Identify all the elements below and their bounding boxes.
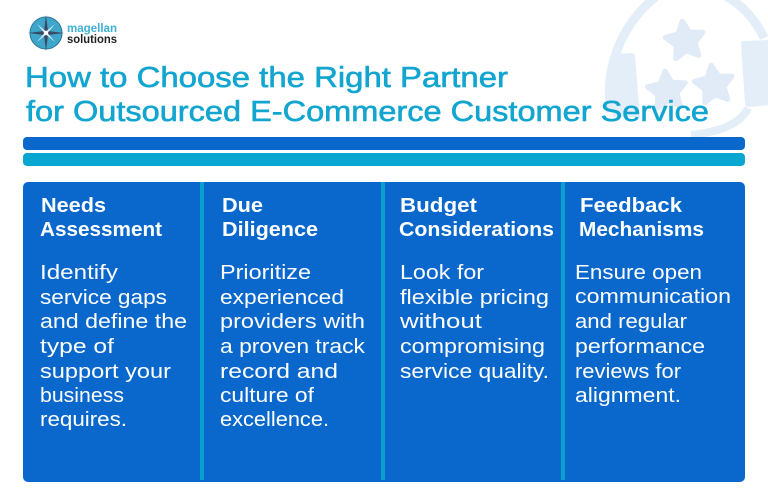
column: needs assessment: Identify <box>40 261 119 284</box>
dark blue bar <box>23 137 745 150</box>
column: needs assessment: requires. <box>40 408 127 431</box>
column: due diligence: excellence. <box>220 408 329 431</box>
column: budget considerations: service quality. <box>400 360 549 383</box>
column: needs assessment: service gaps <box>40 286 167 309</box>
column: budget considerations: without <box>399 310 482 333</box>
teal bar <box>23 153 745 166</box>
column: needs assessment <box>40 195 187 431</box>
column: feedback mechanisms <box>575 195 731 407</box>
column: due diligence: providers with <box>220 310 365 333</box>
column: feedback mechanisms: alignment. <box>575 384 681 407</box>
logo: magellan solutions: solutions <box>67 34 117 46</box>
column: needs assessment: business <box>40 384 124 407</box>
column: budget considerations: flexible pricing <box>400 286 549 309</box>
column: due diligence: a proven track <box>220 335 366 358</box>
column: budget considerations: Considerations <box>399 219 554 241</box>
column: due diligence: culture of <box>220 384 314 407</box>
column: feedback mechanisms: reviews for <box>575 360 681 383</box>
column: due diligence: experienced <box>220 286 344 309</box>
column: due diligence: Diligence <box>222 219 318 241</box>
column: needs assessment: Assessment <box>40 219 162 241</box>
title: for Outsourced E-Commerce Customer Service <box>26 96 709 128</box>
column: needs assessment: type of <box>40 335 114 358</box>
icon: headset with stars watermark <box>609 0 768 135</box>
column: due diligence: Prioritize <box>220 261 311 284</box>
column: budget considerations: compromising <box>400 335 545 358</box>
column: due diligence: Due <box>222 195 263 217</box>
column: budget considerations: Look for <box>400 261 484 284</box>
column: needs assessment: and define the <box>40 310 187 333</box>
column: feedback mechanisms: Feedback <box>580 195 683 217</box>
column: needs assessment: support your <box>40 360 171 383</box>
logo: magellan solutions <box>28 15 117 51</box>
column: budget considerations: Budget <box>400 195 477 217</box>
column: feedback mechanisms: and regular <box>575 310 687 333</box>
title: How to Choose the Right Partner <box>25 62 508 94</box>
column: due diligence <box>220 195 366 431</box>
column: needs assessment: Needs <box>41 195 106 217</box>
column: feedback mechanisms: Mechanisms <box>579 219 704 241</box>
title <box>25 62 709 128</box>
logo wordmark: magellan <box>67 23 117 35</box>
panel: four columns <box>23 182 745 482</box>
column: feedback mechanisms: Ensure open <box>575 261 702 284</box>
column: due diligence: record and <box>220 360 338 383</box>
icon: compass <box>28 15 64 51</box>
column: budget considerations <box>399 195 554 383</box>
column: feedback mechanisms: performance <box>575 335 705 358</box>
column: feedback mechanisms: communication <box>575 285 731 308</box>
